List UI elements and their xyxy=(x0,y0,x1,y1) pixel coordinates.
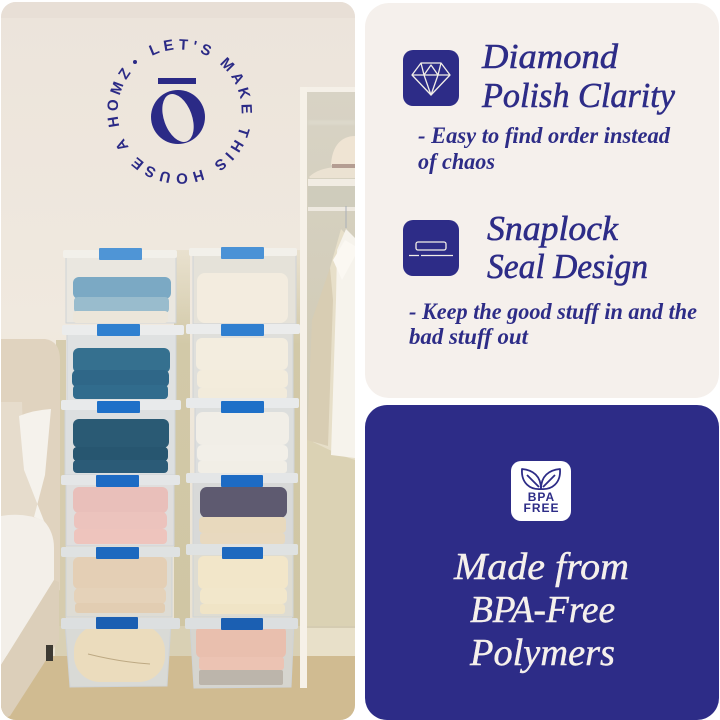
panel: BPA-free callout xyxy=(365,405,719,720)
left box 3: dark teal towels xyxy=(61,400,181,475)
text: snaplock description: - Keep the good stuff in and the xyxy=(409,299,697,324)
right box 2: cream towels xyxy=(186,324,300,401)
left box 4: pink towels xyxy=(61,475,180,546)
callout text xyxy=(453,546,629,674)
circular slogan: LET'S MAKE THIS HOUSE A HOMZ xyxy=(107,39,252,184)
logo mark xyxy=(151,78,205,146)
left box 1: light blue towels xyxy=(63,248,177,323)
separator dot xyxy=(133,60,137,64)
heading: Snaplock Seal Design: Seal Design xyxy=(487,247,648,286)
right stack of boxes xyxy=(185,247,300,688)
right box 6: pink towels and grey blanket xyxy=(185,618,298,688)
text: diamond description: - Easy to find order instead xyxy=(418,123,670,148)
left box 2: teal towels xyxy=(62,324,184,401)
heading: Snaplock Seal Design: Snaplock xyxy=(487,209,619,248)
heading: Diamond Polish Clarity: Diamond xyxy=(481,37,619,76)
right box 3: white towels xyxy=(186,398,299,475)
text: diamond description: of chaos xyxy=(418,149,495,174)
left stack of boxes xyxy=(61,248,184,687)
wall gap behind the stacks xyxy=(56,250,301,630)
icon: snaplock seal xyxy=(403,220,459,276)
callout text: Made from xyxy=(453,546,629,588)
callout text: Polymers xyxy=(469,632,615,674)
callout text: BPA-Free xyxy=(470,589,615,631)
photo panel: stacked storage boxes in a bedroom xyxy=(1,2,355,720)
straw hat on shelf xyxy=(309,136,355,178)
carpet floor xyxy=(1,656,355,720)
right box 5: yellow cream towels xyxy=(186,544,298,617)
right box 1: cream towels xyxy=(189,247,297,324)
heading: Diamond Polish Clarity: Polish Clarity xyxy=(481,76,675,115)
left box 5: tan towels xyxy=(61,547,180,617)
brand logo with circular slogan xyxy=(107,39,252,184)
closet post xyxy=(300,87,307,688)
icon: BPA free badge: BPA xyxy=(528,490,555,504)
heading: Snaplock Seal Design xyxy=(487,209,648,286)
icon: BPA free badge xyxy=(511,461,571,521)
text: diamond description xyxy=(418,123,670,174)
text: snaplock description: bad stuff out xyxy=(409,324,529,349)
bed with pillows xyxy=(1,339,60,720)
hanging white shirts xyxy=(307,206,355,460)
closet interior xyxy=(307,87,355,630)
heading: Diamond Polish Clarity xyxy=(481,37,675,115)
left box 6: rolled blanket xyxy=(61,617,180,687)
text: snaplock description xyxy=(409,299,697,349)
icon: diamond xyxy=(403,50,459,106)
icon: BPA free badge: FREE xyxy=(523,501,560,515)
right box 4: purple and tan towels xyxy=(186,473,298,546)
panel: features xyxy=(365,3,719,398)
